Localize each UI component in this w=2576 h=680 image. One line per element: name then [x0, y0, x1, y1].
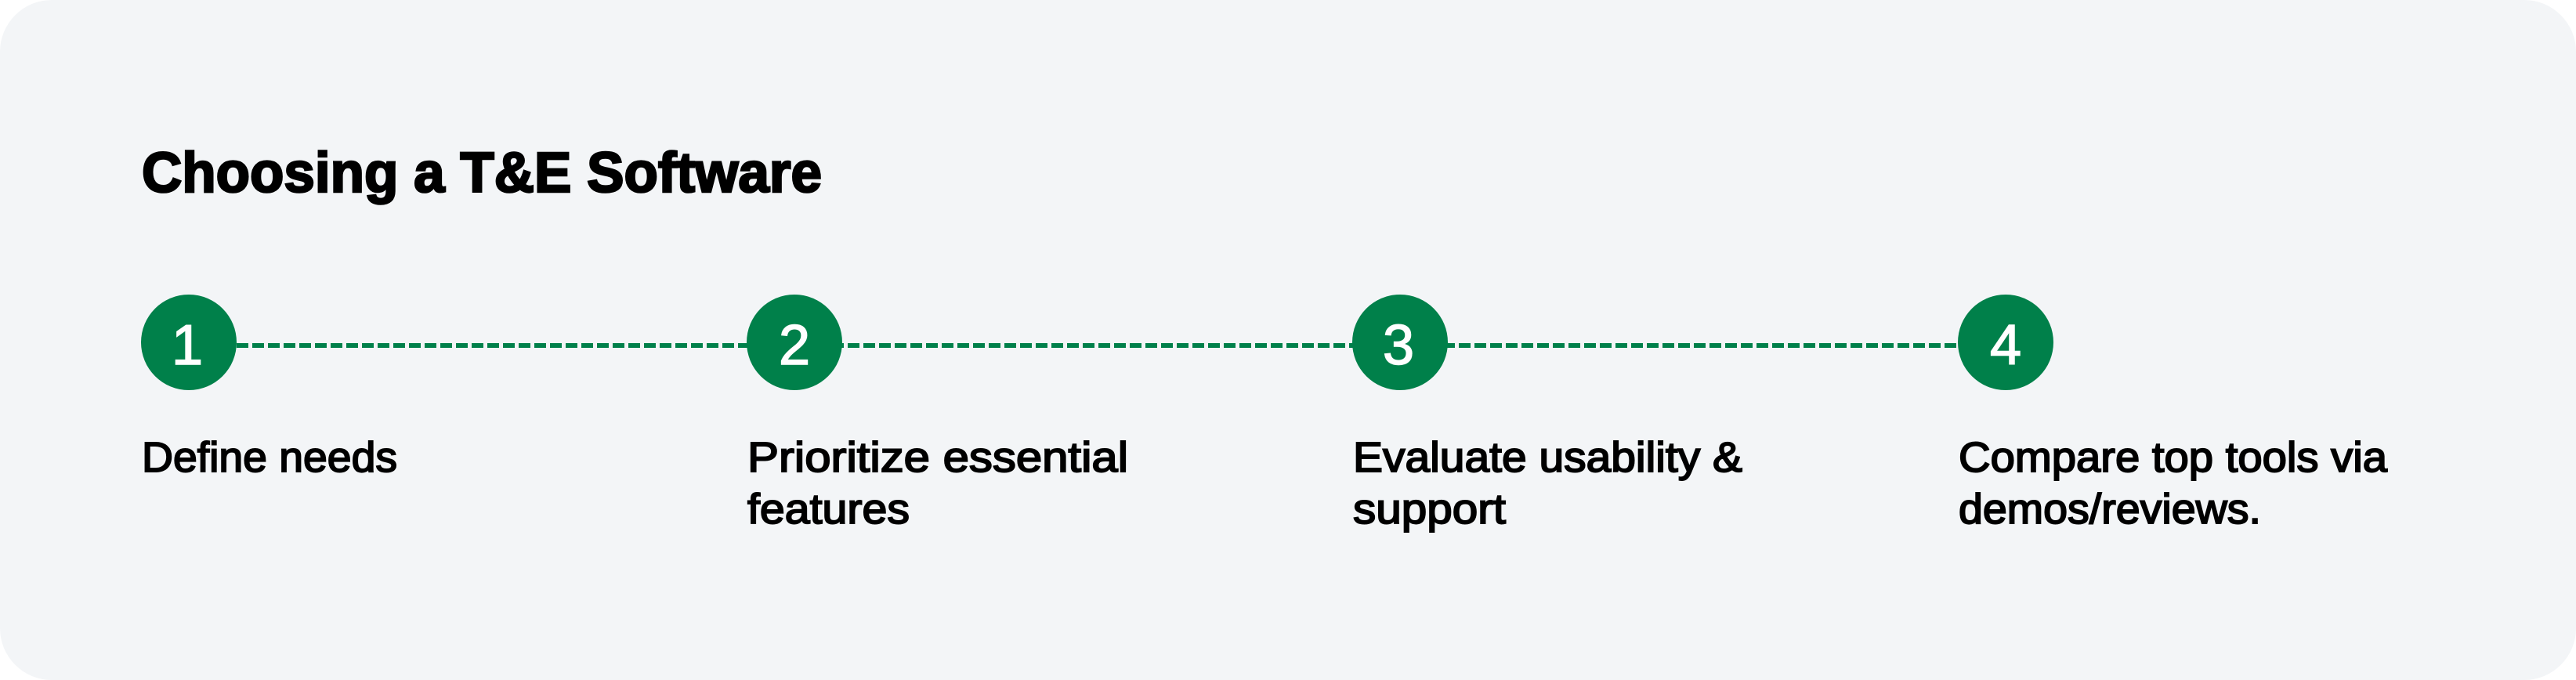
icon: number badge 2 [747, 295, 842, 390]
icon: number badge 3: 3 [1383, 314, 1414, 377]
connector: dashed timeline [237, 343, 1959, 348]
step 4 label: demos/reviews. [1959, 486, 2261, 533]
step 3 [1352, 295, 1742, 533]
step 1 [141, 295, 397, 481]
step 2 [747, 295, 1128, 533]
title: Choosing a T&E Software [142, 142, 822, 204]
step 4 [1958, 295, 2388, 533]
step 2 label: Prioritize essential [747, 434, 1128, 481]
step 3 label: Evaluate usability & [1353, 434, 1742, 481]
icon: number badge 2: 2 [779, 314, 810, 377]
icon: number badge 1: 1 [172, 314, 203, 377]
icon: number badge 3 [1352, 295, 1448, 390]
step 3 label: support [1353, 486, 1506, 533]
step 4 label: Compare top tools via [1959, 434, 2388, 481]
icon: number badge 4 [1958, 295, 2053, 390]
icon: number badge 4: 4 [1990, 314, 2021, 377]
step 2 label: features [747, 486, 910, 533]
icon: number badge 1 [141, 295, 237, 390]
step 1 label: Define needs [142, 434, 397, 481]
